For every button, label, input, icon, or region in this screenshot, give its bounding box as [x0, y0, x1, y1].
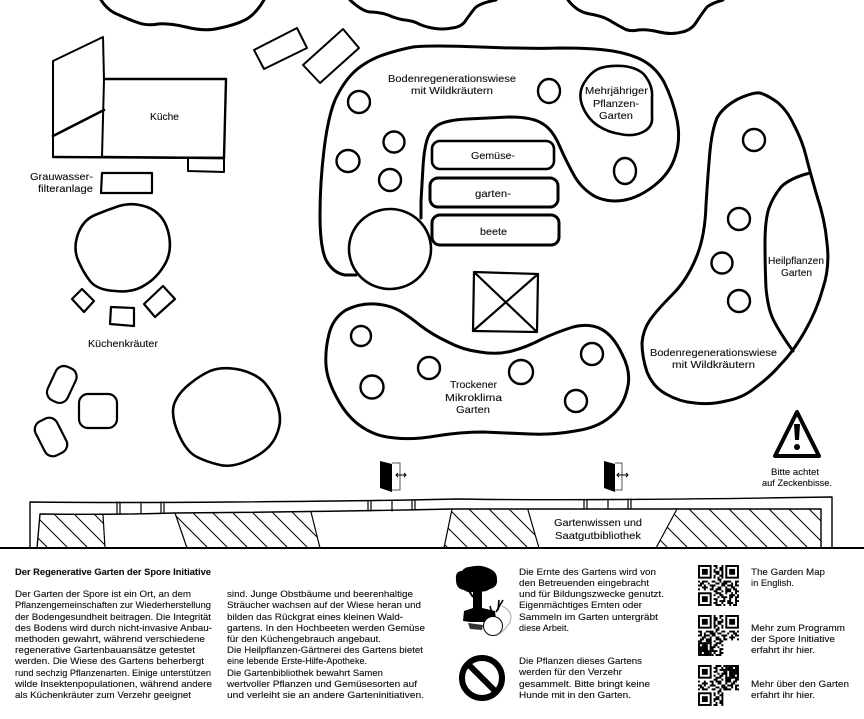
text block: harvest note: Die Ernte des Gartens wird von: [519, 567, 656, 578]
text block: column 2: bilden das Rückgrat eines kleinen Wald-: [227, 612, 403, 623]
label: greywater filter: Grauwasser-: [30, 171, 94, 183]
shapes: building windows: [117, 499, 631, 514]
text block: column 2: wertvoller Pflanzen und Gemüsesorten auf: [226, 679, 417, 690]
label: tick warning: Bitte achtet: [771, 467, 819, 478]
label: perennial garden: Mehrjähriger: [585, 85, 649, 97]
text block: harvest note: diese Arbeit.: [519, 623, 569, 634]
icon: door 1: [380, 461, 406, 492]
text block: column 1: Der Garten der Spore ist ein Ort, an dem: [15, 589, 191, 600]
shape: large tree circle in meadow: [349, 209, 431, 289]
text block: column 1: methoden gewahrt, während verschiedene: [15, 634, 205, 645]
label: right meadow: Bodenregenerationswiese: [650, 347, 777, 359]
label: perennial garden: Pflanzen-: [593, 98, 640, 110]
label: right meadow: mit Wildkräutern: [672, 359, 755, 371]
shape: bed 1: [432, 141, 554, 169]
shape: kitchen walls: [102, 79, 226, 158]
divider line: [0, 547, 864, 549]
shape: raised bed top left: [254, 28, 307, 69]
shape: vegetable beds: [430, 141, 559, 245]
text block: column 2: gartens. In den Hochbeeten werden Gemüse: [227, 623, 425, 634]
text block: column 1: werden. Die Wiese des Gartens beherbergt: [14, 656, 204, 667]
shape: dry microclimate garden: [326, 304, 629, 439]
shapes: shrubs in dry garden: [351, 326, 603, 412]
label: kitchen herbs: Küchenkräuter: [88, 338, 159, 350]
shape: kitchen building: [53, 37, 226, 172]
shape: upper centre tree canopy: [350, 0, 496, 29]
icon: door 2: [604, 461, 628, 492]
label: vegetable beds: Gemüse-: [471, 150, 516, 162]
label: greywater filter: filteranlage: [38, 183, 93, 195]
shape: soil regeneration meadow main: [320, 46, 679, 275]
text block: column 2: eine lebende Erste-Hilfe-Apotheke.: [227, 656, 367, 667]
text block: column 1: als Küchenkräuter zum Verzehr geeignet: [15, 690, 191, 701]
text block: harvest note: und für Bildungszwecke genutzt.: [519, 589, 664, 600]
label: perennial garden: Garten: [599, 110, 633, 122]
text block: column 2: sind. Junge Obstbäume und beerenhaltige: [227, 589, 413, 600]
map: garden plan: [30, 0, 832, 550]
icon: tree with harvest: [456, 566, 511, 636]
label: meadow main: Bodenregenerationswiese: [388, 73, 516, 85]
shape: kitchen herbs area: [72, 204, 175, 350]
shape: raised bed top right: [303, 29, 359, 83]
text block: column 1: des Bodens wird durch nicht-invasive Anbau-: [15, 623, 212, 634]
label: medicinal plant garden: Heilpflanzen: [768, 255, 824, 267]
shape: bed 2: [430, 178, 558, 207]
shape: perennial plant garden: [580, 66, 652, 135]
icon: QR code 3: [698, 666, 739, 705]
label: library: Saatgutbibliothek: [555, 530, 642, 542]
shape: medicinal plant garden: [765, 173, 810, 351]
shapes: herb beds: [72, 286, 175, 326]
shapes: rounded stones lower left: [32, 363, 117, 459]
label: dry microclimate garden: Trockener: [450, 379, 497, 391]
heading: Der Regenerative Garten der Spore Initiative: [15, 567, 211, 578]
text: QR 1 caption: in English.: [751, 578, 794, 589]
shape: bed 3: [432, 215, 559, 245]
text block: column 1: rund sechzig Pflanzenarten. Einige unterstützen: [15, 668, 211, 679]
text block: harvest note: Sammeln im Garten untergräbt: [519, 612, 658, 623]
panel: info text: [14, 567, 428, 701]
icon: prohibition sign: [462, 658, 502, 698]
shapes: shrubs in right meadow: [712, 129, 765, 312]
label: medicinal plant garden: Garten: [781, 267, 812, 279]
text block: column 2: Die Heilpflanzen-Gärtnerei des Gartens bietet: [227, 645, 423, 656]
text block: no dogs note: werden für den Verzehr: [518, 667, 622, 678]
text block: column 2: für den Küchengebrauch angebaut.: [227, 634, 381, 645]
callout: tick warning: [762, 412, 832, 489]
label: vegetable beds: garten-: [475, 188, 512, 200]
shape: upper left tree canopy: [101, 0, 264, 30]
text block: column 1: regenerative Gartenbauansätze getestet: [15, 645, 195, 656]
text: QR 2 caption: der Spore Initiative: [751, 634, 835, 645]
text block: column 1: der Bodengesundheit beitragen. Die Integrität: [15, 612, 211, 623]
shape: lower left tree: [173, 368, 280, 466]
text block: column 2: Sträucher wachsen auf der Wiese heran und: [227, 600, 421, 611]
shape: shed beside kitchen: [53, 37, 104, 157]
text: QR 2 caption: erfahrt ihr hier.: [751, 645, 815, 656]
text: QR 3 caption: Mehr über den Garten: [751, 679, 849, 690]
icon: warning triangle: [775, 412, 819, 456]
shape: greywater filter: [30, 171, 152, 195]
text block: column 2: und verleiht sie an andere Garteninitiativen.: [227, 690, 424, 701]
label: meadow main: mit Wildkräutern: [411, 85, 493, 97]
text: QR 3 caption: erfahrt ihr hier.: [751, 690, 815, 701]
shape: right meadow: [642, 93, 828, 404]
label: dry microclimate garden: Mikroklima: [445, 392, 502, 404]
text block: column 1: wilde Insektenpopulationen, während andere: [14, 679, 212, 690]
shapes: hatched wall sections: [38, 508, 820, 547]
label: vegetable beds: beete: [480, 226, 507, 238]
text block: no dogs note: gesammelt. Bitte bringt keine: [519, 679, 650, 690]
label: library: Gartenwissen und: [554, 517, 642, 529]
shape: kitchen annex: [188, 158, 224, 172]
label: dry microclimate garden: Garten: [456, 404, 490, 416]
text block: no dogs note: Die Pflanzen dieses Gartens: [519, 656, 642, 667]
shape: library building: [30, 497, 832, 550]
shape: upper right tree canopy: [568, 0, 723, 34]
text block: column 2: Die Gartenbibliothek bewahrt Samen: [227, 668, 383, 679]
text block: column 1: Pflanzengemeinschaften zur Wiederherstellung: [15, 600, 211, 611]
shapes: shrubs in main meadow: [336, 79, 636, 191]
text block: harvest note: den Betreuenden eingebracht: [519, 578, 649, 589]
shape: crossed box: [473, 272, 538, 332]
label: kitchen: Küche: [150, 111, 179, 123]
text: QR 1 caption: The Garden Map: [751, 567, 825, 578]
icon: QR code 2: [698, 616, 739, 655]
text block: no dogs note: Hunde mit in den Garten.: [519, 690, 631, 701]
text block: harvest note: Eigenmächtiges Ernten oder: [519, 600, 642, 611]
text: QR 2 caption: Mehr zum Programm: [751, 623, 845, 634]
icon: QR code 1: [698, 566, 739, 605]
label: tick warning: auf Zeckenbisse.: [762, 478, 832, 489]
